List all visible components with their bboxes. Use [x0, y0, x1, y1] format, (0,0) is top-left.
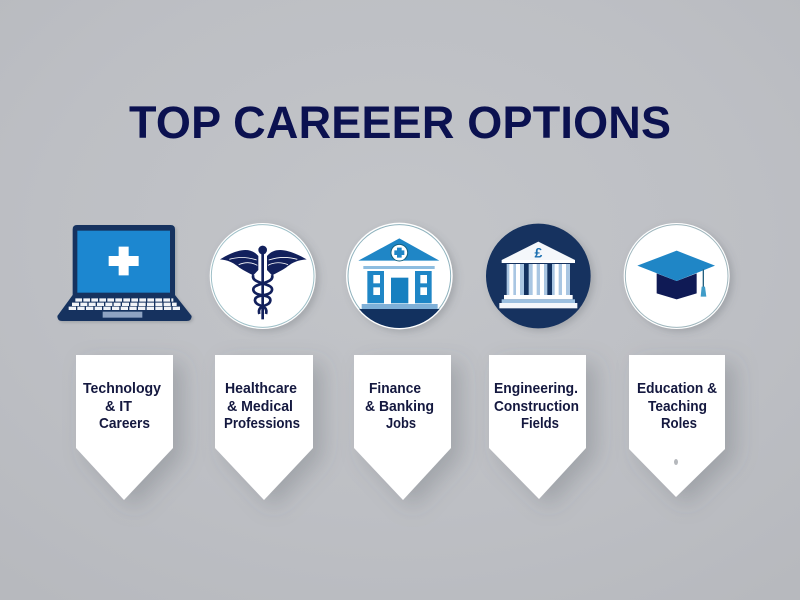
panel: technology and IT careers	[76, 355, 173, 500]
label: engineering: Engineering.	[494, 380, 578, 397]
label: healthcare: & Medical	[227, 398, 293, 415]
panel: engineering and construction fields	[489, 355, 586, 499]
label: technology	[83, 380, 162, 432]
label: technology: & IT	[105, 398, 132, 415]
icon: bank building in navy circle	[486, 224, 591, 328]
label: healthcare	[224, 380, 300, 432]
label: technology: Technology	[83, 380, 162, 397]
panel: finance and banking jobs	[354, 355, 451, 500]
title: TOP CAREEER OPTIONS	[129, 97, 671, 148]
label: technology: Careers	[99, 415, 150, 432]
label: education: Teaching	[648, 398, 707, 415]
icon: graduation cap in white circle	[624, 223, 730, 329]
icon: laptop with medical cross	[57, 225, 192, 321]
label: engineering: Fields	[521, 415, 559, 432]
label: education: Roles	[661, 415, 697, 432]
label: finance: Jobs	[386, 415, 416, 432]
label: healthcare: Healthcare	[225, 380, 297, 397]
panel: education and teaching roles	[629, 355, 725, 497]
label: education: Education &	[637, 380, 717, 397]
label: engineering: Construction	[494, 398, 579, 415]
icon: caduceus in white circle	[210, 223, 316, 329]
label: finance: Finance	[369, 380, 421, 397]
icon: bank building in navy circle: £	[534, 245, 542, 261]
label: finance: & Banking	[365, 398, 434, 415]
label: engineering	[494, 380, 579, 432]
label: finance	[365, 380, 434, 432]
label: education	[637, 380, 717, 432]
panel: healthcare and medical professions	[215, 355, 313, 500]
label: healthcare: Professions	[224, 415, 300, 432]
icon: hospital building in white circle	[343, 223, 457, 332]
